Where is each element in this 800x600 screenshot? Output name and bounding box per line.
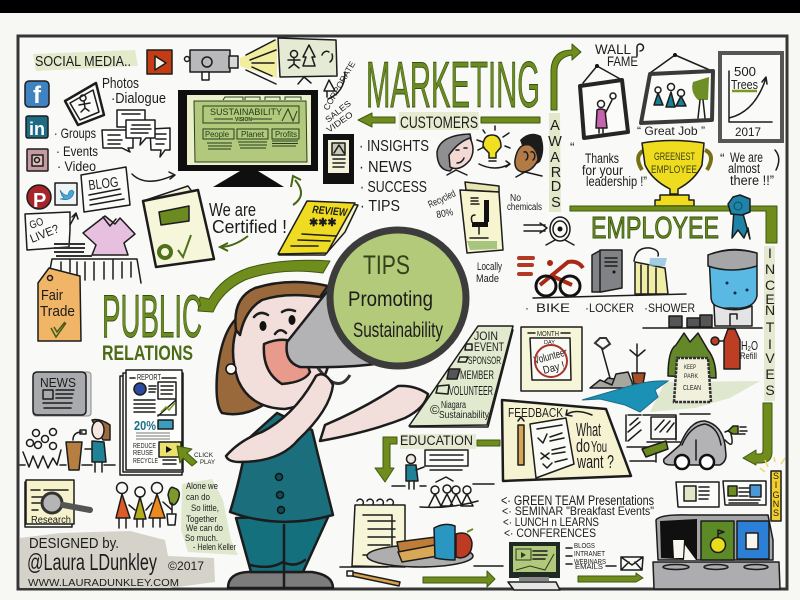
- panel: research: Research: [31, 515, 71, 526]
- panel: join card: EVENT: [474, 340, 504, 354]
- hair ponytail: [217, 312, 268, 414]
- panel: credits: DESIGNED by.: [29, 535, 119, 552]
- icon: pencil: [347, 571, 400, 586]
- arrow: green bottom left: [423, 571, 495, 587]
- icon: go live sign: GO: [28, 216, 46, 232]
- panel: volunteer day calendar: Day !: [542, 360, 566, 377]
- pointing arm: [320, 386, 428, 441]
- panel: review: ✱✱✱: [309, 217, 337, 229]
- vertical label: incentives: E: [765, 366, 775, 382]
- quote: we are almost there: [720, 150, 779, 188]
- icon: pinterest: P: [33, 190, 46, 212]
- icon: dark-haired woman: [515, 134, 543, 177]
- hair top: [235, 282, 328, 335]
- icon: linkedin: in: [29, 119, 45, 139]
- vertical label: incentives: T: [766, 319, 775, 335]
- icon: video play: [147, 50, 172, 74]
- icon: linkedin: [26, 116, 48, 139]
- panel: review: [278, 201, 358, 255]
- label: signs: G: [772, 490, 780, 500]
- panel: join card: ©: [430, 402, 440, 417]
- sign panel: left: [676, 482, 719, 507]
- label: wall of fame: WALL: [595, 41, 631, 57]
- monitor title: [203, 106, 299, 123]
- panel: join card: JOIN: [474, 329, 498, 343]
- heading: social media: SOCIAL MEDIA..: [35, 53, 131, 70]
- panel: report: REDUCE: [133, 441, 156, 450]
- icon: recycling station: [653, 515, 780, 589]
- icon: rocks on ground: [590, 372, 633, 388]
- arrow: review to monitor: [291, 176, 301, 205]
- quote: thanks for your leadership: [570, 140, 647, 189]
- panel: feedback: do: [576, 436, 590, 456]
- arrow: click play: PLAY: [200, 459, 216, 466]
- quote: thanks for your leadership: for your: [582, 163, 623, 178]
- vertical label: incentives: N: [765, 261, 775, 277]
- text: photos and dialogue: [102, 75, 166, 107]
- icon: pinterest: [27, 185, 51, 212]
- panel: report: 20%: [134, 418, 156, 433]
- label: signs: N: [773, 499, 779, 509]
- panel: join card: MEMBER: [460, 368, 494, 382]
- bin: green compost: [701, 521, 734, 560]
- vertical label: incentives: N: [765, 302, 775, 318]
- icon: locker: [592, 250, 622, 292]
- shirt: [230, 413, 333, 522]
- projection screen: [278, 38, 337, 84]
- panel: blog: BLOG: [87, 173, 119, 193]
- panel: chair document: [460, 182, 503, 253]
- panel: join card: Niagara: [441, 400, 466, 411]
- quote: we are almost there: almost: [728, 161, 760, 176]
- icon: tablet: [323, 134, 354, 184]
- text: green team list: <· GREEN TEAM Presentations: [501, 493, 654, 508]
- heading: education: EDUCATION: [400, 433, 473, 448]
- text: blogs intranet webinars emails: EMAILS: [575, 562, 603, 571]
- figure: woman with megaphone: Sustainability: [353, 319, 443, 342]
- label: signs: I: [775, 480, 777, 490]
- text: groups events video: [54, 125, 98, 174]
- text: corporate sales video: SALES: [323, 98, 353, 125]
- panel: helen keller quote: So much.: [185, 533, 218, 544]
- vertical label: incentives: [764, 245, 775, 401]
- icon: pink shirt: [83, 216, 135, 255]
- pants: [236, 515, 329, 572]
- vertical label: awards: [548, 113, 562, 212]
- arm holding megaphone: [226, 374, 333, 462]
- panel: feedback: You: [591, 439, 607, 456]
- icon: trees with park sign: KEEP: [684, 364, 696, 371]
- label: no chemicals: [507, 193, 542, 213]
- baseline under notebook: [340, 566, 503, 567]
- arrow: green bottom right: [578, 573, 643, 582]
- panel: volunteer day calendar: MONTH: [537, 331, 559, 338]
- profits box: Profits: [275, 130, 297, 139]
- mouth: [264, 340, 310, 384]
- labels: bike locker shower: ·: [644, 301, 648, 315]
- vertical label: incentives: C: [765, 277, 775, 293]
- vertical label: awards: D: [551, 179, 561, 195]
- panel: join card: [409, 326, 513, 427]
- panel: certified folder: [143, 186, 214, 267]
- vertical label: incentives: E: [765, 291, 775, 307]
- monitor title: SUSTAINABILITY: [210, 107, 282, 117]
- icon: trophy: GREENEST: [654, 151, 695, 163]
- buttons: [276, 474, 284, 514]
- people box: People: [205, 130, 230, 139]
- panel: research: [25, 480, 90, 527]
- panel: report: REUSE: [133, 448, 153, 457]
- icon: target: [524, 217, 574, 245]
- icon: shower: [634, 248, 668, 294]
- panel: fair trade tag: [38, 268, 81, 341]
- arrow: to education lower left: [375, 437, 397, 482]
- icon: instagram: [27, 149, 48, 171]
- text: insights list: [359, 138, 429, 215]
- icon: blue ribbon: [728, 195, 750, 239]
- panel: helen keller quote: We can do: [186, 523, 223, 534]
- panel: report: REPORT: [137, 373, 161, 382]
- sign panel: right: [723, 481, 766, 505]
- panel: report: [120, 370, 183, 475]
- panel: helen keller quote: - Helen Keller: [193, 542, 236, 553]
- text: insights list: · NEWS: [359, 159, 412, 176]
- text: corporate sales video: VIDEO: [324, 109, 355, 135]
- icon: audience and speaker: [20, 420, 115, 472]
- arrow: to certified: [220, 236, 248, 251]
- icon: shovel: [595, 338, 620, 386]
- panel: credits: @Laura LDunkley: [27, 549, 157, 575]
- quote: thanks for your leadership: Thanks: [585, 151, 619, 166]
- quote: thanks for your leadership: leadership !”: [586, 174, 647, 189]
- icon: trees with park sign: [668, 333, 716, 402]
- face: [233, 286, 330, 409]
- caption: great job: “ Great Job ”: [637, 124, 705, 138]
- text: groups events video: · Video: [57, 158, 96, 174]
- bin: black trash: [660, 519, 697, 560]
- labels: bike locker shower: ·: [525, 301, 529, 315]
- icon: refill bottle: [711, 329, 740, 369]
- sign: vip parking: [642, 441, 668, 462]
- figure: woman with megaphone: TIPS: [363, 250, 410, 280]
- icon: speech bubbles: [102, 110, 170, 157]
- icon: trophy: EMPLOYEE: [651, 164, 697, 176]
- icon: trees with park sign: PARK: [684, 373, 699, 380]
- projector beam: [240, 40, 277, 84]
- icon: photo frame: [65, 83, 104, 125]
- panel: volunteer day calendar: Volunteer: [533, 346, 569, 367]
- text: insights list: · TIPS: [360, 198, 400, 215]
- panel: volunteer day calendar: [521, 327, 582, 391]
- panel: feedback: [502, 400, 631, 481]
- panel: news: [33, 372, 91, 416]
- label: recycled 80%: [427, 188, 458, 221]
- panel: blog: [81, 167, 130, 212]
- text: photos and dialogue: Photos: [102, 75, 139, 92]
- eyes and nose: [254, 310, 296, 334]
- megaphone: [287, 288, 375, 367]
- labels: bike locker shower: SHOWER: [648, 301, 695, 315]
- label: H2O refill: H₂O: [741, 338, 758, 353]
- label: signs: S: [773, 471, 779, 481]
- arrows: to blogs list: [566, 548, 616, 566]
- panel: join card: SPONSOR: [468, 355, 501, 367]
- frame: person with balloon: [580, 64, 628, 138]
- text: blogs intranet webinars emails: BLOGS: [574, 541, 595, 550]
- panel: feedback: What: [576, 420, 601, 440]
- text: green team list: <· LUNCH n LEARNS: [503, 515, 599, 529]
- vertical label: incentives: I: [768, 336, 772, 352]
- shelf arrow: green bar: [570, 206, 777, 243]
- labels: bike locker shower: BIKE: [536, 301, 570, 315]
- label: wall of fame: [595, 41, 643, 69]
- vertical label: incentives: S: [765, 382, 775, 398]
- arrow: click play: [177, 446, 216, 466]
- arrow: click play: CLICK: [194, 452, 214, 459]
- panel: helen keller quote: [181, 479, 238, 555]
- icon: electric car: [626, 414, 747, 469]
- labels: bike locker shower: ·: [585, 301, 589, 315]
- cups on counter: [643, 315, 762, 328]
- panel: join card: Sustainability: [439, 410, 489, 421]
- text: blogs intranet webinars emails: [574, 541, 606, 571]
- label: locally made: [476, 261, 502, 285]
- planet box: Planet: [241, 130, 265, 139]
- panel: report: RECYCLE: [133, 456, 158, 465]
- label: signs: S: [773, 508, 779, 518]
- icon: lake and ground: [582, 381, 760, 412]
- frame: 500 trees chart: Trees: [731, 77, 758, 92]
- label: locally made: Made: [476, 273, 499, 285]
- panel: review: REVIEW: [312, 204, 349, 219]
- icon: teacher and students: [392, 450, 494, 507]
- text: green team list: <· SEMINAR "Breakfast Events": [502, 504, 654, 518]
- frame: great job group: [641, 53, 713, 123]
- panel: helen keller quote: Together: [186, 514, 217, 525]
- panel: feedback: FEEDBACK: [508, 405, 563, 420]
- frame: 500 trees chart: 2017: [735, 125, 761, 139]
- text: insights list: · INSIGHTS: [359, 138, 429, 155]
- figure: woman with megaphone: Promoting: [348, 288, 433, 311]
- megaphone lens: tips: [330, 230, 466, 366]
- icon: gray-haired woman: [437, 134, 473, 175]
- quote: thanks for your leadership: “: [570, 140, 574, 155]
- text: we are certified: [209, 200, 287, 237]
- label: H2O refill: Refill: [740, 351, 757, 362]
- text: groups events video: · Events: [56, 143, 98, 159]
- icon: water cooler: [708, 249, 757, 326]
- text: corporate sales video: CORPORATE: [321, 59, 357, 112]
- icon: facebook: [25, 81, 49, 109]
- quote: we are almost there: We are: [730, 150, 763, 165]
- icon: light bulb: [477, 126, 510, 168]
- vertical label: incentives: V: [765, 350, 775, 366]
- labels: bike locker shower: LOCKER: [589, 301, 634, 315]
- vertical label: awards: W: [548, 134, 562, 150]
- icon: go live sign: LIVE?: [28, 221, 61, 246]
- icon: bike: [519, 258, 583, 296]
- heading: employee: EMPLOYEE: [591, 210, 719, 245]
- text: insights list: · SUCCESS: [360, 179, 427, 196]
- monitor title: VISION: [235, 117, 252, 123]
- label: locally made: Locally: [477, 261, 502, 273]
- quote: we are almost there: “: [720, 151, 724, 166]
- label: no chemicals: No: [510, 193, 521, 204]
- vertical label: awards: A: [550, 118, 560, 134]
- icon: envelope: [621, 557, 643, 570]
- panel: credits: [20, 531, 215, 589]
- panel: lunch notebook: [352, 499, 405, 567]
- clothing rack: [49, 244, 141, 283]
- icon: trees with park sign: CLEAN: [683, 383, 701, 392]
- text: PUBLIC: [102, 283, 202, 350]
- quote: we are almost there: there !!”: [730, 173, 774, 188]
- panel: volunteer day calendar: DAY: [544, 340, 555, 346]
- icon: go live sign: [25, 212, 78, 250]
- vertical label: awards: A: [550, 150, 560, 166]
- frame: 500 trees chart: 500: [734, 64, 756, 79]
- bin: blue cans: [737, 521, 769, 559]
- panel: helen keller quote: So little,: [191, 503, 219, 514]
- icon: trophy: [638, 140, 711, 206]
- label: signs: [760, 457, 785, 521]
- text: blogs intranet webinars emails: WEBINARS: [574, 557, 606, 566]
- icon: potted plant: [630, 344, 645, 384]
- labels: bike locker shower: [525, 301, 695, 315]
- text: green team list: [501, 493, 654, 540]
- panel: news: NEWS: [40, 376, 76, 390]
- arrow: blog to monitor: [132, 172, 175, 181]
- arrow: awards up to wall of fame: [551, 44, 581, 110]
- panel: credits: ©2017: [168, 561, 204, 573]
- text: blogs intranet webinars emails: INTRANET: [574, 549, 605, 558]
- panel: feedback: want ?: [576, 452, 614, 472]
- text: MARKETING: [366, 48, 540, 121]
- icon: facebook: f: [33, 82, 42, 109]
- text: corporate sales video: [321, 59, 357, 135]
- label: H2O refill: [740, 338, 758, 362]
- text: we are certified: We are: [209, 200, 256, 220]
- icon: computer: [508, 542, 560, 590]
- panel: helen keller quote: can do: [186, 492, 210, 503]
- panel: fair trade tag: Trade: [40, 303, 75, 320]
- panel: helen keller quote: Alone we: [186, 481, 218, 492]
- icon: plate with food: [367, 524, 473, 567]
- label: recycled 80%: 80%: [436, 207, 454, 221]
- label: no chemicals: chemicals: [507, 202, 542, 213]
- vertical label: awards: R: [551, 165, 561, 181]
- shoes: [228, 572, 333, 588]
- frame: 500 trees chart: [720, 53, 782, 141]
- label: wall of fame: FAME: [607, 53, 638, 69]
- figure: woman with megaphone: [217, 230, 466, 588]
- heading: relations: RELATIONS: [102, 342, 193, 365]
- arrow: green swoosh to public relations: [198, 260, 330, 312]
- text: photos and dialogue: ·Dialogue: [111, 90, 166, 107]
- icon: twitter: [55, 183, 77, 205]
- arrow: incentives down to signs: [743, 403, 772, 465]
- icon: three people holding hands: [116, 482, 179, 528]
- label: recycled 80%: Recycled: [427, 188, 458, 211]
- panel: join card: VOLUNTEER: [449, 383, 493, 398]
- label: customers with arrows: CUSTOMERS: [400, 113, 478, 132]
- baseline under bike, locker, shower: [533, 294, 686, 298]
- vertical label: incentives: I: [768, 245, 772, 261]
- panel: monitor: [178, 90, 318, 187]
- text: we are certified: Certified !: [212, 217, 287, 237]
- text: green team list: <· CONFERENCES: [504, 526, 596, 540]
- panel: fair trade tag: Fair: [41, 287, 63, 304]
- icon: projector camera: [184, 50, 238, 80]
- vertical label: awards: S: [551, 195, 561, 211]
- label: customers with arrows: [358, 112, 540, 132]
- panel: credits: WWW.LAURADUNKLEY.COM: [28, 578, 179, 589]
- text: groups events video: · Groups: [54, 125, 96, 141]
